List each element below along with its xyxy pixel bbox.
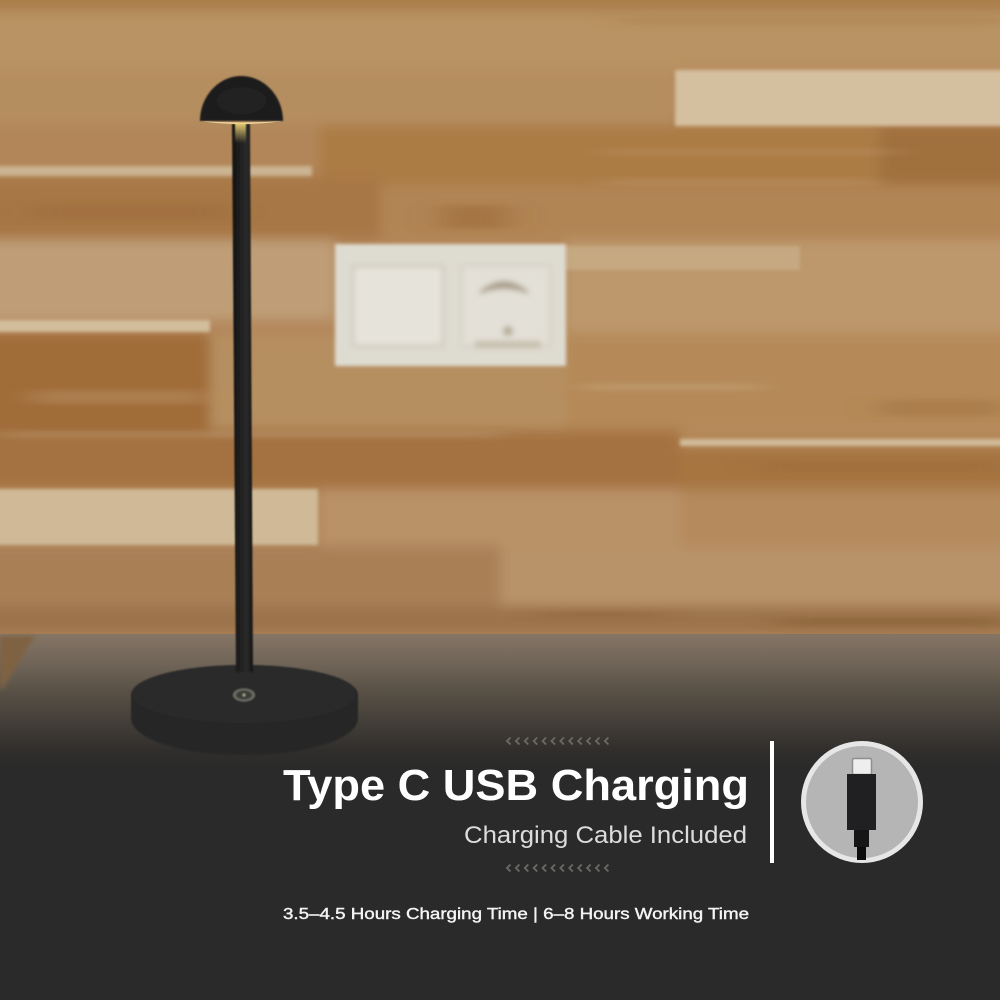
dark lower panel <box>0 770 1000 1000</box>
table surface <box>0 634 1000 770</box>
wood grain streaks <box>0 18 1000 626</box>
lamp pole <box>232 124 253 672</box>
bottom chevron row <box>507 864 608 872</box>
vertical divider <box>770 741 774 863</box>
wood wall background <box>0 0 1000 640</box>
lamp shade <box>200 76 283 143</box>
touch button <box>233 688 255 702</box>
charging and working time: 3.5–4.5 Hours Charging Time | 6–8 Hours Working Time <box>283 906 749 923</box>
top chevron row <box>507 738 608 744</box>
wall socket plate <box>335 244 566 366</box>
icon: usb-c cable <box>804 744 920 860</box>
lamp base <box>131 665 358 755</box>
title: Type C USB Charging <box>283 761 749 810</box>
lamp <box>131 76 358 755</box>
light glow <box>200 121 283 124</box>
subtitle: Charging Cable Included <box>464 822 747 849</box>
